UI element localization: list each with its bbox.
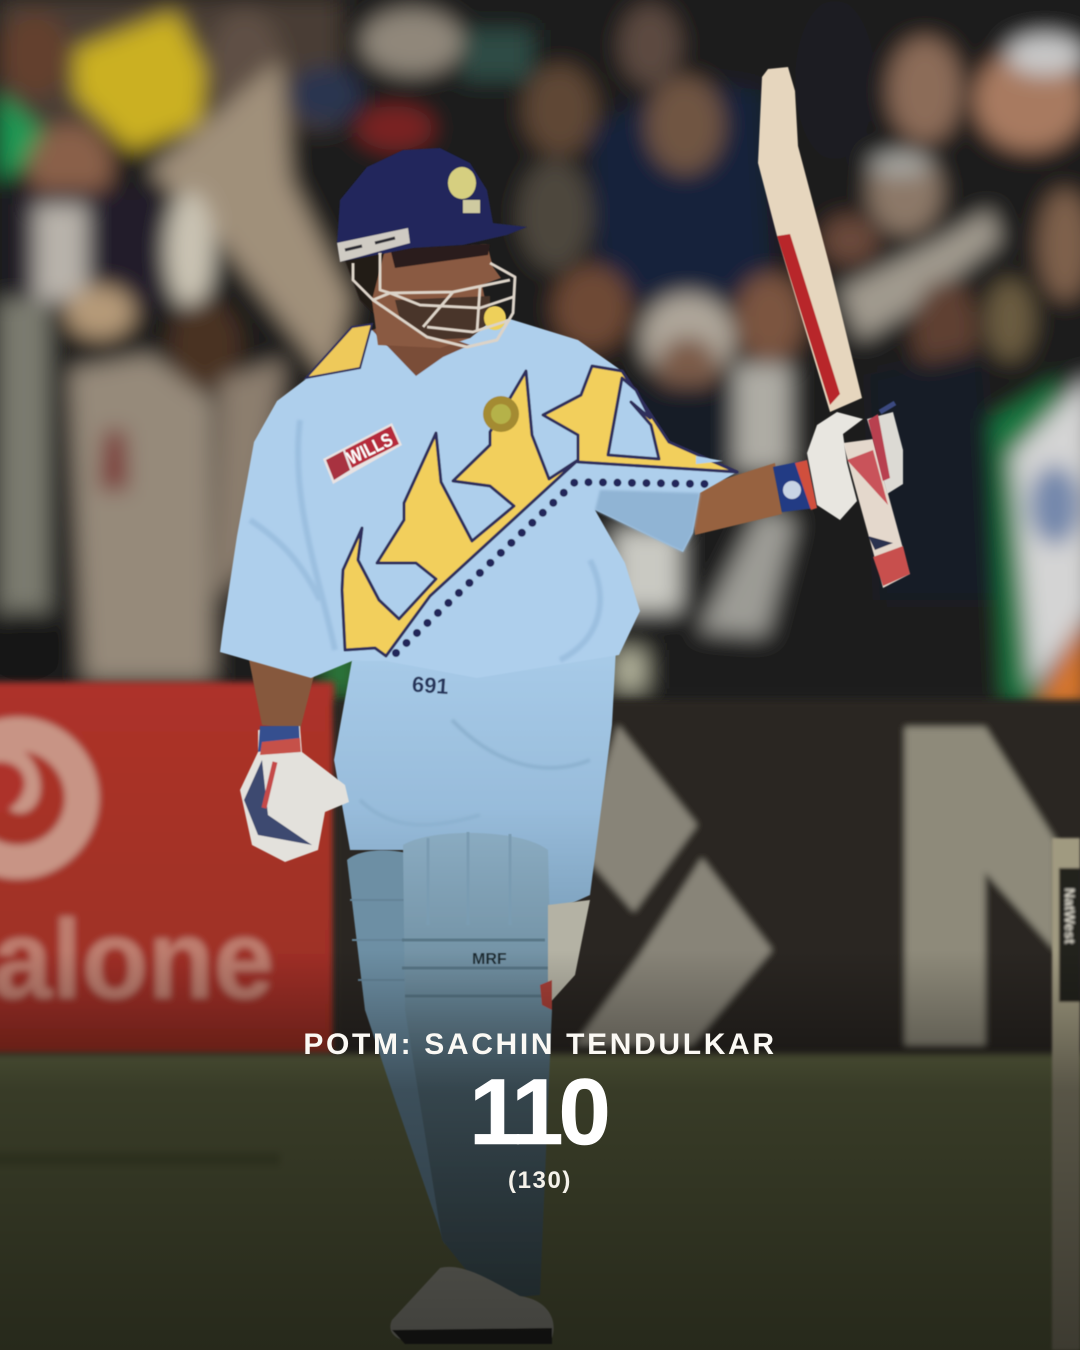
background: red advertising hoarding xyxy=(0,682,334,1054)
player: trousers xyxy=(334,648,616,915)
player: left glove xyxy=(240,726,349,862)
shirt: yellow shoulder xyxy=(543,366,737,472)
player: lower left arm xyxy=(248,655,318,730)
shirt: dotted trim xyxy=(396,482,706,653)
player: front leg pad xyxy=(402,832,590,1300)
background: stumps xyxy=(1052,838,1080,1350)
player: wristband xyxy=(773,460,817,512)
shirt: neck xyxy=(372,320,470,376)
background: stumps: NatWest xyxy=(1062,888,1078,944)
player: shoe xyxy=(390,1267,554,1344)
player: helmet xyxy=(337,148,527,347)
shirt: sponsor patch xyxy=(323,423,402,484)
background: crowd xyxy=(0,0,1080,710)
player: shirt xyxy=(220,319,737,678)
shirt: crest badge xyxy=(483,396,519,432)
shirt: fold shading xyxy=(250,420,600,660)
player: neck and face xyxy=(345,244,506,348)
player: bat xyxy=(758,67,910,588)
player: shirt: WILLS xyxy=(344,430,396,469)
background: dark advertising hoarding xyxy=(335,700,1080,1060)
player: rear leg pad xyxy=(347,850,445,1245)
background: grass xyxy=(0,1054,1080,1350)
background: red advertising hoarding: alone xyxy=(0,897,274,1022)
caption: player of the match label: POTM: SACHIN TENDULKAR xyxy=(303,1028,777,1061)
caption: runs scored: 110 xyxy=(469,1059,606,1164)
helmet: grille xyxy=(353,253,515,347)
player: trousers: 691 xyxy=(411,672,450,699)
shirt: yellow crown xyxy=(342,371,578,656)
player: forearm xyxy=(690,463,782,535)
shirt: collar xyxy=(306,324,372,378)
caption block xyxy=(303,1028,777,1194)
caption: balls faced: (130) xyxy=(508,1167,572,1194)
player: front leg pad: MRF xyxy=(472,951,507,968)
player: right glove xyxy=(807,403,903,520)
photo darkening gradient xyxy=(0,950,1080,1350)
